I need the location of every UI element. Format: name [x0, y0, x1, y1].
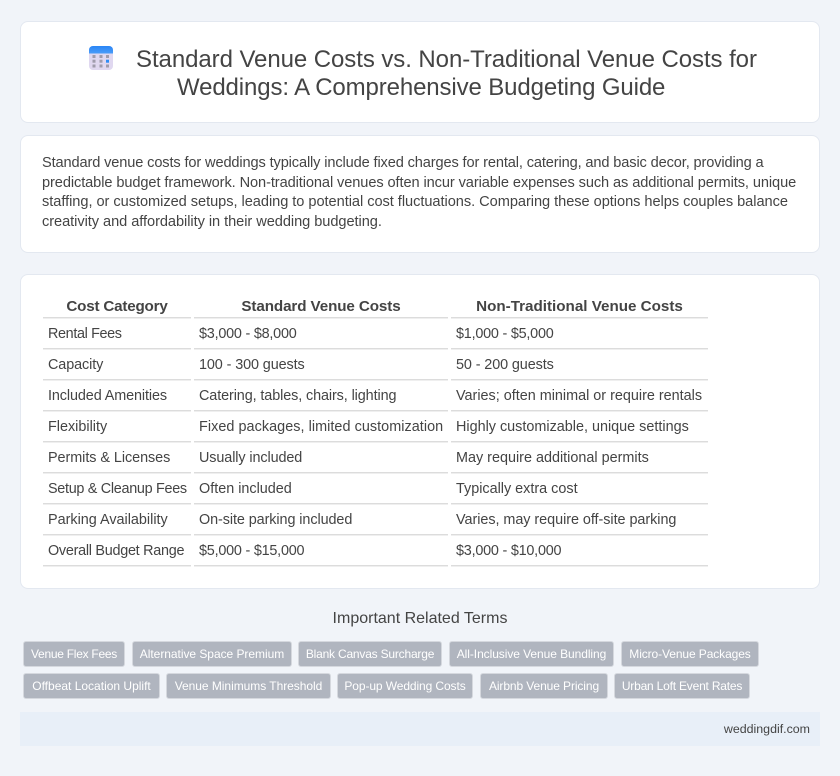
header card [20, 21, 820, 123]
related term tags: Alternative Space Premium [140, 647, 284, 661]
table: Capacity [48, 357, 103, 373]
table: Often included [199, 481, 292, 497]
related term tags: Venue Minimums Threshold [175, 679, 322, 693]
footer bar [20, 712, 820, 746]
intro text: Standard venue costs for weddings typically include fixed charges for rental, catering, and basic decor, providing a [42, 155, 764, 171]
table: Setup & Cleanup Fees [48, 481, 187, 497]
related term tags: Airbnb Venue Pricing [489, 679, 599, 693]
table: Fixed packages, limited customization [199, 419, 443, 435]
table: Varies; often minimal or require rentals [456, 388, 702, 404]
table: Non-Traditional Venue Costs [476, 298, 683, 315]
table: Highly customizable, unique settings [456, 419, 689, 435]
related term tags: Urban Loft Event Rates [622, 679, 742, 693]
table: Permits & Licenses [48, 450, 170, 466]
panel: intro paragraph [20, 135, 820, 253]
table [43, 298, 708, 567]
table: Catering, tables, chairs, lighting [199, 388, 396, 404]
table: $1,000 - $5,000 [456, 326, 554, 342]
panel: comparison table [20, 274, 820, 589]
table: 50 - 200 guests [456, 357, 554, 373]
intro text: creativity and affordability in their wedding budgeting. [42, 214, 382, 230]
table: $3,000 - $8,000 [199, 326, 297, 342]
title: Weddings: A Comprehensive Budgeting Guide [177, 74, 665, 101]
title [136, 46, 757, 101]
related term tags: Venue Flex Fees [31, 647, 117, 661]
related term tags: Micro-Venue Packages [629, 647, 751, 661]
heading: related terms: Important Related Terms [333, 610, 507, 627]
intro text [42, 155, 796, 230]
related term tags: All-Inclusive Venue Bundling [457, 647, 606, 661]
related term tags: Offbeat Location Uplift [32, 679, 151, 693]
table: Typically extra cost [456, 481, 578, 497]
footer source text: weddingdif.com [724, 722, 810, 736]
table: On-site parking included [199, 512, 352, 528]
intro text: predictable budget framework. Non-traditional venues often incur variable expenses such as additional permits, unique [42, 175, 796, 191]
related term tags: Pop-up Wedding Costs [344, 679, 466, 693]
table: Flexibility [48, 419, 107, 435]
table: Varies, may require off-site parking [456, 512, 676, 528]
title: Standard Venue Costs vs. Non-Traditional Venue Costs for [136, 46, 757, 73]
table: Rental Fees [48, 326, 122, 342]
table: May require additional permits [456, 450, 649, 466]
table: Overall Budget Range [48, 543, 184, 559]
table: $5,000 - $15,000 [199, 543, 304, 559]
table: Standard Venue Costs [241, 298, 401, 315]
related term tags: Blank Canvas Surcharge [306, 647, 434, 661]
icon: calendar [89, 46, 113, 70]
table: $3,000 - $10,000 [456, 543, 561, 559]
table: Usually included [199, 450, 302, 466]
table: Parking Availability [48, 512, 168, 528]
table: Included Amenities [48, 388, 167, 404]
table: 100 - 300 guests [199, 357, 305, 373]
related term tags [23, 641, 759, 699]
intro text: staffing, or customized setups, leading to potential cost fluctuations. Comparing these options helps couples balance [42, 194, 788, 210]
table: Cost Category [66, 298, 168, 315]
